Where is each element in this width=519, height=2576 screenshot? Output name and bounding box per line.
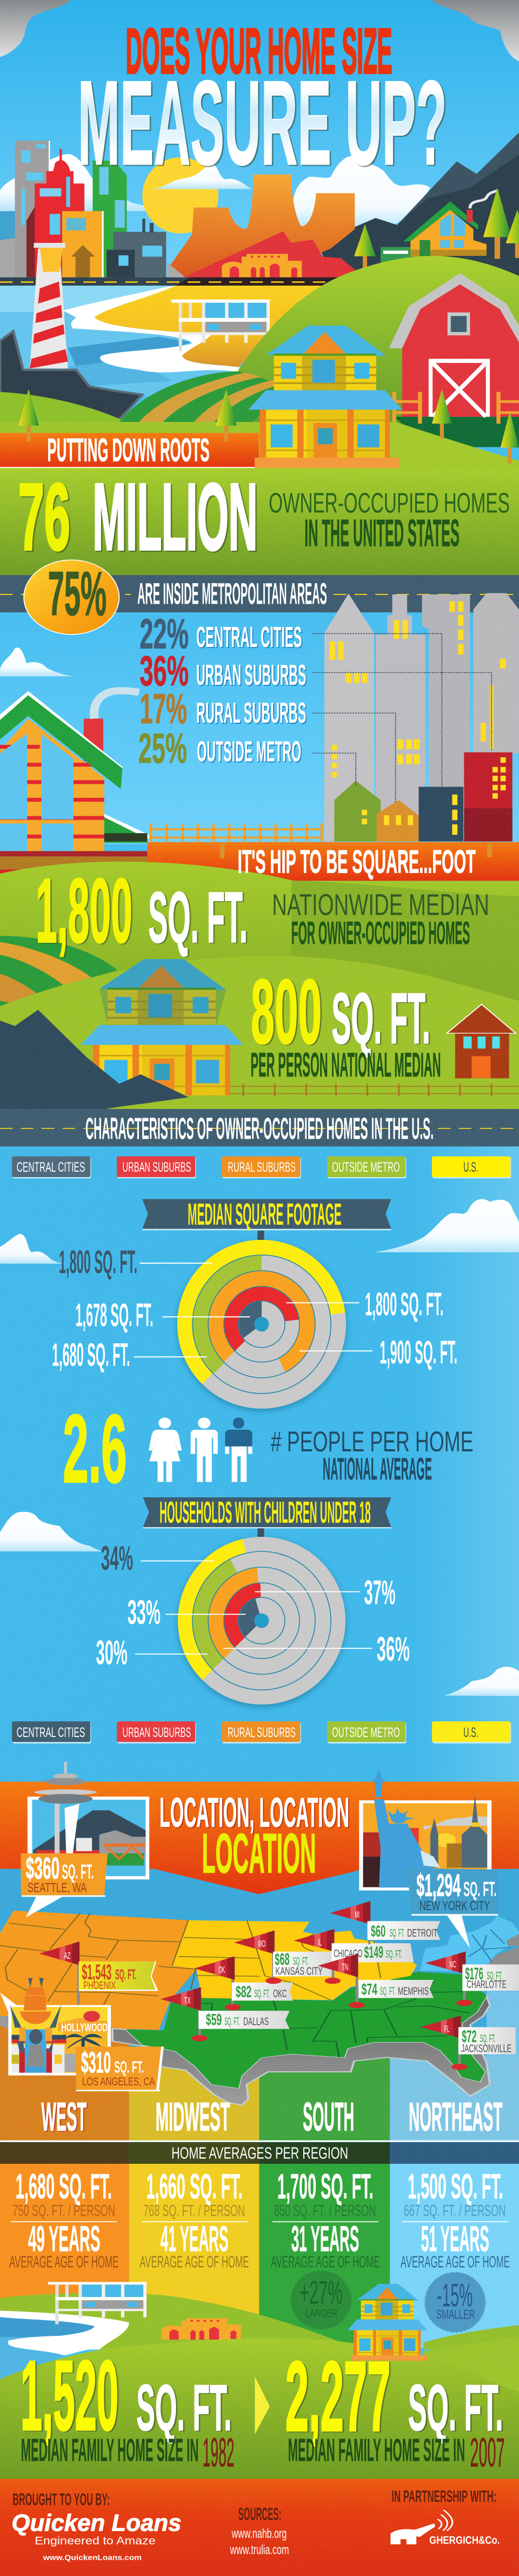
arrow bbox=[255, 2376, 270, 2434]
22% central cities: 22% bbox=[139, 611, 189, 658]
regions table: 750 SQ. FT. / PERSON bbox=[12, 2202, 115, 2220]
tag: los angeles bbox=[76, 2046, 164, 2091]
flag: florida: FL bbox=[444, 2023, 449, 2034]
36% urban suburbs: 36% bbox=[139, 648, 189, 695]
green house block bbox=[334, 781, 381, 842]
text: SQ. FT. bbox=[114, 2058, 144, 2076]
orange fence bbox=[149, 823, 323, 842]
donut chart: median square footage bbox=[153, 1216, 370, 1433]
cabin base bbox=[0, 851, 147, 874]
closing stats: 1982 bbox=[203, 2429, 234, 2475]
tag: phoenix: PHOENIX bbox=[83, 1979, 116, 1991]
characteristics section bbox=[0, 1109, 519, 1799]
legend bottom: URBAN SUBURBS bbox=[123, 1725, 191, 1740]
green hill bbox=[238, 256, 519, 433]
water corner bbox=[0, 2337, 99, 2379]
badge: 27 percent larger bbox=[291, 2271, 351, 2329]
legend: us bbox=[432, 1721, 511, 1743]
legend top: RURAL SUBURBS bbox=[228, 1160, 296, 1174]
palm tree bbox=[64, 2034, 103, 2049]
legend: central cities bbox=[12, 1721, 91, 1743]
winding river path bbox=[63, 286, 275, 381]
sun bbox=[142, 157, 218, 234]
footer: SOURCES: bbox=[238, 2505, 281, 2524]
pylons bbox=[10, 2005, 61, 2054]
17% rural suburbs: 17% bbox=[139, 685, 187, 732]
regions table: AVERAGE AGE OF HOME bbox=[139, 2253, 249, 2271]
lower hill bbox=[0, 956, 519, 1111]
orange building bbox=[62, 211, 104, 278]
south region bbox=[126, 1972, 487, 2088]
icon: woman bbox=[149, 1418, 182, 1482]
tag: chicago bbox=[331, 1943, 414, 1962]
left cloud bbox=[0, 1512, 103, 1551]
cabin bbox=[381, 190, 498, 263]
square foot section: 1,800 bbox=[36, 860, 132, 962]
lighthouse bbox=[30, 243, 68, 368]
median chart labels: 1,680 SQ. FT. bbox=[52, 1336, 130, 1373]
barn fence bbox=[392, 392, 519, 424]
regions table bbox=[0, 2095, 519, 2349]
legend bottom bbox=[12, 1721, 511, 1743]
footer: BROUGHT TO YOU BY: bbox=[12, 2490, 110, 2509]
tag: chicago: CHICAGO bbox=[334, 1947, 362, 1960]
ribbon: median square footage bbox=[142, 1197, 391, 1231]
small red house bbox=[447, 1005, 516, 1078]
people per home and households: 2.6 bbox=[63, 1395, 127, 1503]
orange heading band bbox=[0, 1781, 519, 1894]
state lines bbox=[0, 1913, 381, 2005]
dark factory bbox=[107, 219, 166, 278]
stats block: 76 million bbox=[0, 422, 519, 869]
tag: dallas: $59 bbox=[206, 2011, 222, 2029]
donut chart: households with children bbox=[154, 1512, 370, 1729]
tag: kansas city bbox=[273, 1951, 332, 1977]
legend: central cities: CENTRAL CITIES bbox=[17, 1725, 85, 1740]
badge: 27 percent larger: LARGER bbox=[305, 2307, 337, 2320]
column: midwest bbox=[139, 2167, 249, 2271]
connector lines bbox=[313, 633, 491, 803]
adobe building bbox=[222, 254, 302, 278]
trunk stubs bbox=[220, 844, 492, 858]
hero scene bbox=[0, 0, 519, 447]
tag: kansas city: $68 bbox=[275, 1951, 290, 1969]
metro sky bbox=[0, 612, 519, 844]
tag: seattle bbox=[21, 1852, 108, 1917]
flag: north carolina: NC bbox=[449, 1959, 456, 1970]
tag: dallas: DALLAS bbox=[243, 2015, 269, 2027]
flag: florida bbox=[421, 2016, 516, 2070]
legend: outside metro bbox=[327, 1157, 406, 1178]
photo: new york bbox=[359, 1795, 491, 1891]
theatre centre bbox=[19, 2027, 52, 2073]
right cloud bbox=[292, 156, 430, 229]
hollywood callout: HOLLYWOOD bbox=[61, 2020, 108, 2034]
flag: oklahoma bbox=[194, 1957, 293, 2010]
south state lines bbox=[202, 1981, 470, 2057]
legend: us: U.S. bbox=[463, 1160, 478, 1174]
road bbox=[0, 278, 344, 286]
northeast cape bbox=[488, 1934, 519, 1966]
beach bbox=[94, 286, 341, 367]
flag: missouri: MO bbox=[258, 1938, 265, 1949]
median chart labels bbox=[52, 1244, 457, 1373]
tag: phoenix bbox=[79, 1960, 158, 1991]
footer: www.trulia.com bbox=[230, 2542, 289, 2557]
section banner: putting down roots bbox=[0, 432, 259, 468]
regions table: +27% bbox=[300, 2274, 343, 2310]
photo background bbox=[11, 2007, 108, 2073]
right cloud bbox=[443, 1667, 519, 1696]
small cloud bbox=[0, 648, 75, 676]
right hill bbox=[291, 881, 519, 1001]
legend: urban suburbs bbox=[117, 1157, 196, 1178]
households chart labels and legend: 37% bbox=[364, 1573, 396, 1611]
households chart labels and legend bbox=[12, 1538, 511, 1743]
flag: oklahoma: OK bbox=[218, 1964, 225, 1975]
water bbox=[0, 286, 275, 396]
regions table: WEST bbox=[42, 2095, 86, 2139]
northeast bbox=[420, 1916, 519, 1971]
sky bbox=[0, 1146, 519, 1799]
lime hill right bbox=[0, 422, 519, 577]
striped fields bbox=[0, 936, 117, 1012]
tower one bbox=[324, 593, 374, 842]
tag: seattle: $360 bbox=[26, 1852, 59, 1886]
sky bbox=[0, 0, 519, 287]
west bbox=[0, 1911, 196, 2030]
text: LOS ANGELES, CA bbox=[82, 2075, 155, 2088]
space needle bbox=[34, 1762, 97, 1853]
left hill and water bbox=[0, 2293, 351, 2349]
chinese theatre roof bbox=[20, 1978, 51, 2024]
modern house bbox=[48, 2282, 147, 2324]
modern white house bbox=[171, 300, 270, 351]
house tint bbox=[99, 959, 226, 1025]
ribbon post bbox=[257, 1231, 264, 1240]
column: west bbox=[9, 2167, 118, 2271]
midwest bbox=[172, 1920, 417, 2000]
tag: phoenix: SQ. FT. bbox=[115, 1966, 136, 1983]
tag: detroit: $60 bbox=[371, 1922, 385, 1940]
ribbon: households bbox=[143, 1496, 391, 1530]
flag: michigan: MI bbox=[355, 1908, 360, 1920]
map of the USA bbox=[0, 1911, 519, 2030]
adobe house bbox=[162, 2319, 241, 2340]
legend top: CENTRAL CITIES bbox=[17, 1160, 85, 1174]
dark mountains bbox=[318, 133, 519, 276]
median chart labels: 1,800 SQ. FT. bbox=[59, 1244, 137, 1280]
legend: us bbox=[432, 1157, 511, 1178]
tag: memphis: $74 bbox=[362, 1980, 377, 1998]
tag: new york bbox=[407, 1867, 498, 1948]
tag: kansas city: SQ. FT. bbox=[293, 1954, 309, 1967]
footer bbox=[0, 2479, 519, 2576]
legend top bbox=[12, 1157, 511, 1178]
column bodies bbox=[0, 2164, 519, 2348]
section banner: hip to be square bbox=[147, 842, 519, 881]
tag: okc bbox=[232, 1983, 293, 2000]
legend: us: U.S. bbox=[463, 1725, 478, 1740]
flag: north carolina bbox=[425, 1952, 519, 2006]
big hill bbox=[0, 2339, 519, 2479]
distant sea and grey ground bbox=[0, 211, 20, 278]
right cloud bbox=[374, 1199, 519, 1252]
tag: detroit: SQ. FT. bbox=[390, 1926, 404, 1939]
dark mountains bbox=[0, 1010, 189, 1109]
people per home and households bbox=[0, 1395, 519, 1696]
stats block: 76 million: OUTSIDE METRO bbox=[197, 735, 301, 768]
right hill bbox=[424, 2325, 519, 2349]
red dome building bbox=[26, 149, 84, 278]
legend bottom: RURAL SUBURBS bbox=[228, 1725, 296, 1740]
label 30 percent: 30% bbox=[96, 1633, 128, 1672]
location section: MEMPHIS bbox=[398, 1985, 429, 1997]
red ridges bbox=[184, 232, 357, 278]
orange house block bbox=[377, 800, 424, 842]
square foot section bbox=[0, 842, 519, 1111]
navy block bbox=[418, 787, 463, 842]
stats block: 76 million: RURAL SUBURBS bbox=[196, 696, 306, 729]
red block bbox=[464, 752, 513, 842]
tag: okc: $82 bbox=[236, 1983, 251, 2000]
closing stats: 1,520 bbox=[21, 2340, 118, 2451]
tag: chicago: SQ. FT. bbox=[385, 1947, 402, 1960]
36% urban suburbs bbox=[139, 648, 306, 695]
flag: tennessee: TN bbox=[342, 1961, 348, 1972]
photo frame bbox=[8, 2005, 111, 2076]
foreground trees bbox=[18, 389, 519, 464]
white point bbox=[0, 1992, 17, 2016]
ribbon post bbox=[257, 1528, 264, 1538]
caption 1982 bbox=[21, 2429, 234, 2475]
white path bbox=[8, 2336, 103, 2355]
tag: detroit bbox=[368, 1921, 440, 1940]
regions table: 41 YEARS bbox=[161, 2218, 228, 2259]
median chart labels: 1,678 SQ. FT. bbox=[76, 1297, 153, 1333]
grey west edge bbox=[0, 2012, 10, 2029]
location section: DETROIT bbox=[407, 1926, 437, 1939]
legend: rural suburbs bbox=[222, 1157, 301, 1178]
tag: dallas bbox=[198, 2011, 290, 2029]
quicken url: www.QuickenLoans.com bbox=[43, 2553, 142, 2562]
location section: SQ. FT. bbox=[62, 1860, 94, 1884]
tower four bbox=[474, 593, 519, 753]
flag: dallas: TX bbox=[184, 1995, 191, 2006]
tag: kansas city: KANSAS CITY bbox=[275, 1965, 323, 1977]
flag: dallas bbox=[161, 1987, 290, 2041]
large cabin bbox=[0, 691, 157, 869]
stats block: 76 million: PUTTING DOWN ROOTS bbox=[48, 432, 210, 468]
legend: central cities bbox=[12, 1157, 91, 1178]
tag: memphis: SQ. FT. bbox=[380, 1985, 396, 1997]
flag: illinois bbox=[294, 1929, 414, 1984]
17% rural suburbs bbox=[139, 685, 306, 732]
dark hill shadow bbox=[394, 417, 519, 447]
closing yellow house bbox=[348, 2284, 427, 2361]
label 34 percent: 34% bbox=[101, 1538, 133, 1577]
east sea bbox=[487, 1991, 519, 2089]
sea background bbox=[0, 1869, 519, 2090]
regions table: 1,680 SQ. FT. bbox=[16, 2167, 112, 2206]
flag: arizona: AZ bbox=[64, 1950, 70, 1961]
engineered to amaze: Engineered to Amaze bbox=[35, 2534, 156, 2547]
stats block: 76 million: 76 bbox=[18, 464, 70, 570]
rocks bbox=[0, 331, 142, 420]
lime gradient bbox=[0, 467, 519, 576]
right hill bbox=[424, 2337, 519, 2393]
regions table: 49 YEARS bbox=[28, 2218, 101, 2259]
barn bbox=[389, 273, 519, 417]
75 percent badge bbox=[24, 559, 119, 635]
label 33 percent: 33% bbox=[128, 1593, 161, 1632]
dark band bbox=[0, 2142, 519, 2164]
region colour bands bbox=[0, 2025, 519, 2141]
location section bbox=[0, 1762, 519, 2070]
legend top: URBAN SUBURBS bbox=[123, 1160, 191, 1174]
tag: memphis bbox=[358, 1980, 434, 1998]
regions table: 768 SQ. FT. / PERSON bbox=[143, 2202, 245, 2220]
tower two bbox=[376, 595, 425, 842]
main title bbox=[78, 15, 447, 190]
background trees bbox=[354, 188, 519, 270]
green building bbox=[92, 161, 127, 278]
left cloud bbox=[0, 1234, 66, 1264]
tag: phoenix: $1,543 bbox=[82, 1960, 111, 1984]
top-left storm cloud bbox=[0, 0, 71, 57]
25% outside metro: 25% bbox=[138, 725, 187, 772]
tag: seattle: SEATTLE, WA bbox=[28, 1881, 87, 1895]
location background bbox=[0, 1781, 519, 2090]
tag: los angeles: $310 bbox=[81, 2046, 111, 2079]
25% outside metro bbox=[138, 725, 301, 772]
grey tower bbox=[15, 141, 50, 278]
footer: www.nahb.org bbox=[231, 2526, 287, 2541]
hollywood callout bbox=[0, 1978, 164, 2091]
section yellow house bbox=[81, 959, 243, 1095]
left hill bbox=[0, 392, 147, 433]
photo: seattle bbox=[28, 1796, 149, 1879]
tower three bbox=[422, 595, 470, 788]
lime ground bbox=[0, 422, 262, 467]
tag: jacksonville bbox=[458, 2026, 516, 2055]
legend: urban suburbs bbox=[117, 1721, 196, 1743]
south map and coast bbox=[0, 1972, 519, 2141]
regions table: MIDWEST bbox=[156, 2095, 230, 2139]
icon: man with navy shirt bbox=[225, 1418, 252, 1482]
tag: dallas: SQ. FT. bbox=[224, 2015, 240, 2027]
flag: arizona bbox=[39, 1941, 158, 2005]
tag: chicago: $149 bbox=[364, 1944, 383, 1961]
22% central cities bbox=[139, 611, 302, 658]
column: northeast bbox=[401, 2167, 510, 2271]
tag: okc: SQ. FT. bbox=[254, 1987, 270, 2000]
centre cloud bbox=[152, 163, 251, 189]
flag: missouri bbox=[234, 1931, 332, 1984]
metro road band bbox=[0, 575, 519, 612]
stats block: 76 million: CENTRAL CITIES bbox=[196, 620, 302, 653]
tag: okc: OKC bbox=[273, 1987, 287, 2000]
closing stats bbox=[0, 2336, 519, 2576]
coast ribbon bbox=[112, 1996, 490, 2105]
road band bbox=[0, 1109, 519, 1146]
legend bottom: OUTSIDE METRO bbox=[332, 1725, 400, 1740]
northeast lines bbox=[468, 1930, 512, 1962]
column: south bbox=[271, 2167, 380, 2271]
flag: michigan bbox=[330, 1901, 440, 1944]
skyscrapers bbox=[324, 593, 519, 842]
flag: illinois: IL bbox=[318, 1937, 322, 1947]
regions table: AVERAGE AGE OF HOME bbox=[9, 2253, 118, 2271]
bottom hill bbox=[106, 1095, 519, 1111]
stats block: 76 million: URBAN SUBURBS bbox=[196, 658, 306, 691]
tag: charlotte bbox=[462, 1964, 519, 1991]
striped farm fields bbox=[119, 371, 275, 433]
hill background bbox=[0, 862, 519, 1111]
mesa bbox=[167, 174, 355, 278]
icon: elephant logo bbox=[390, 2510, 453, 2544]
white divider bbox=[0, 2141, 519, 2142]
statue of liberty bbox=[372, 1768, 440, 1887]
left cloud bbox=[0, 154, 181, 211]
households chart labels and legend: 36% bbox=[377, 1629, 410, 1668]
top-right storm cloud bbox=[432, 0, 519, 61]
hero yellow house bbox=[248, 326, 402, 468]
legend: rural suburbs bbox=[222, 1721, 301, 1743]
quicken loans logo: Quicken Loans bbox=[11, 2509, 182, 2536]
icon: man bbox=[191, 1418, 218, 1482]
wooden fence bbox=[172, 1084, 519, 1097]
legend: outside metro bbox=[327, 1721, 406, 1743]
badge: 15 percent smaller bbox=[425, 2273, 485, 2332]
stats block: 76 million: 75% bbox=[48, 559, 107, 629]
tag: jacksonville: $72 bbox=[462, 2026, 477, 2046]
flag: tennessee bbox=[318, 1954, 434, 2008]
